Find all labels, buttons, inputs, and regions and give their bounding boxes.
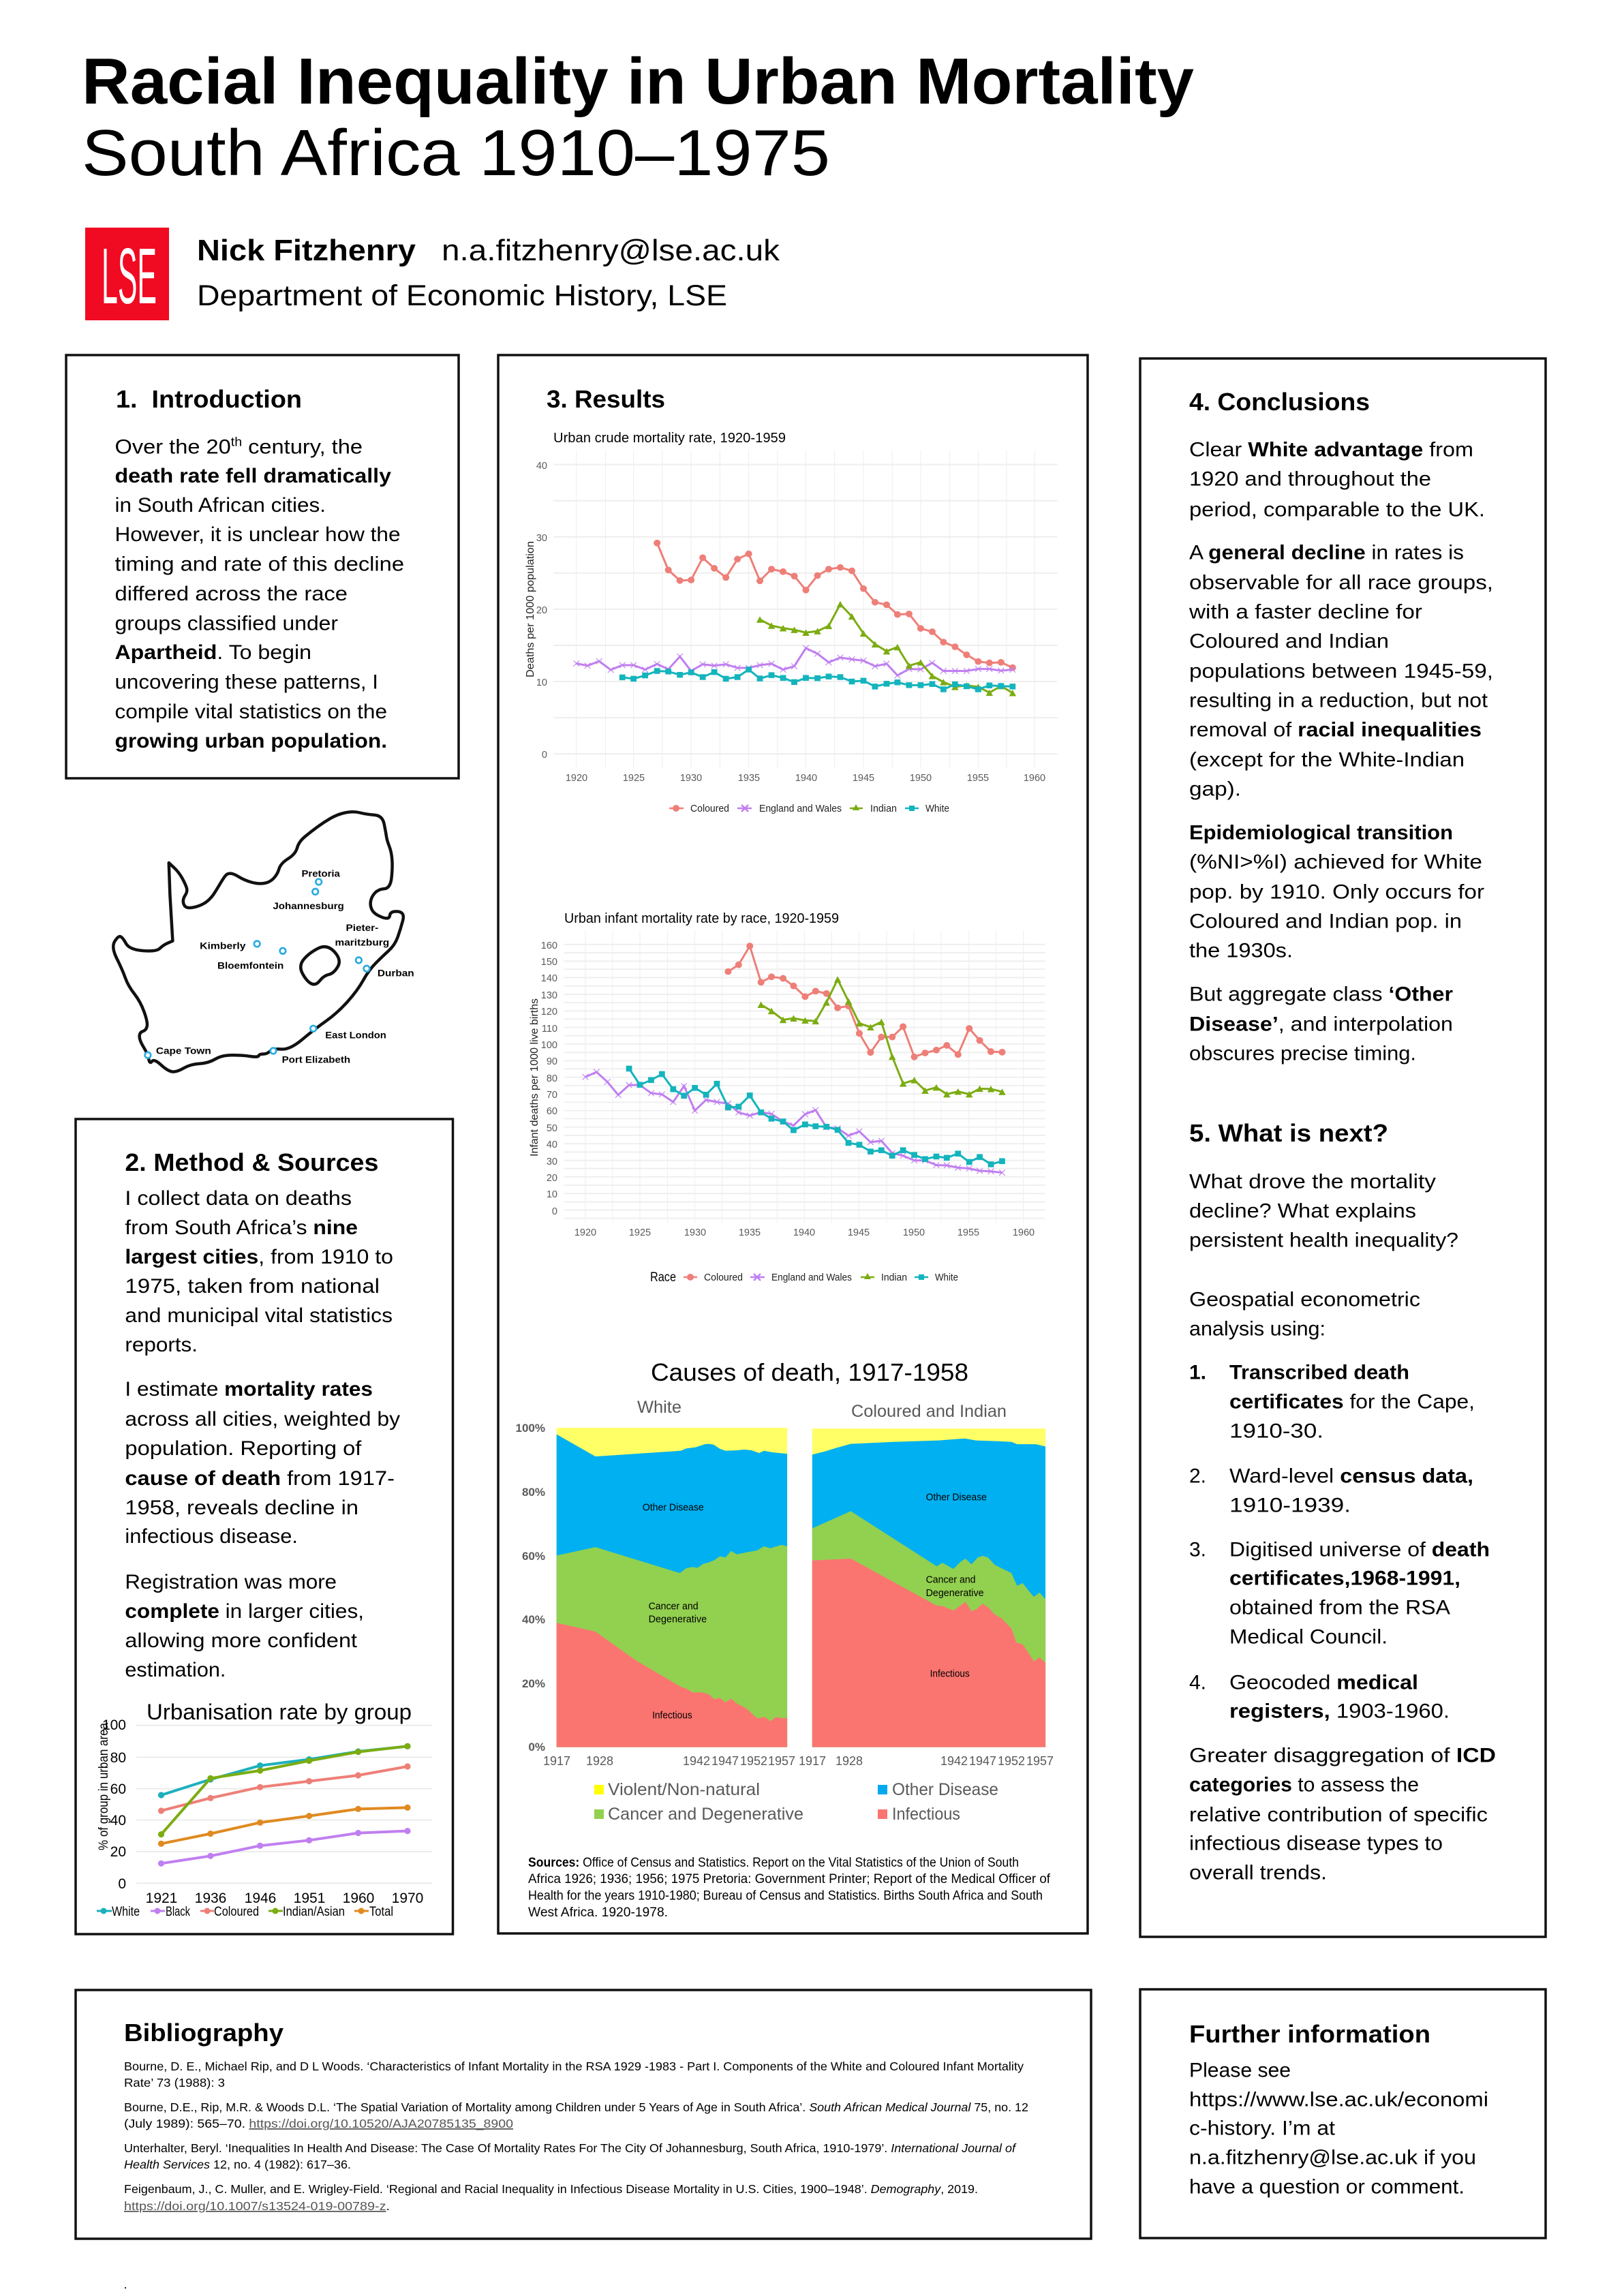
stacked area chart: causes of death: 1917 <box>799 1754 826 1768</box>
text block: further information body: https://www.lse.ac.uk/economi <box>1189 2088 1488 2111</box>
line chart: urban infant mortality rate: Coloured <box>704 1272 743 1283</box>
text block: introduction body: However, it is unclear how the <box>114 523 401 546</box>
line chart: urban crude mortality rate: Indian <box>870 803 897 814</box>
text block: method body: Registration was more <box>125 1571 337 1593</box>
line chart: urban crude mortality rate: 1945 <box>853 773 874 784</box>
icon: LSE logo <box>85 228 169 320</box>
text block: references: Health Services 12, no. 4 (1982): 617–36. <box>124 2158 351 2171</box>
map: South Africa cities: Kimberly <box>200 940 246 951</box>
line chart: urban infant mortality rate: Race <box>650 1270 676 1285</box>
stacked area chart: causes of death: 20% <box>522 1677 545 1690</box>
text block: references: Bourne, D.E., Rip, M.R. & Woods D.L. ‘The Spatial Variation of Mortality among Children under 5 Years of Age in South Africa’. South African Medical Journal 75, no. 12 <box>124 2100 1028 2114</box>
line chart: urbanisation rate by group: 20 <box>110 1844 126 1860</box>
text block: conclusions body: period, comparable to the UK. <box>1189 499 1485 521</box>
text block: introduction body: century, the <box>242 436 363 458</box>
stacked area chart: causes of death: 1952 <box>740 1754 767 1768</box>
line chart: urban crude mortality rate: 1955 <box>967 773 989 784</box>
text block: introduction body: growing urban population. <box>114 730 387 752</box>
text block: what is next body: overall trends. <box>1189 1862 1327 1884</box>
text block: what is next body: certificates for the Cape, <box>1229 1390 1475 1413</box>
stacked area chart: causes of death: 1942 <box>940 1754 968 1768</box>
text block: method body: largest cities , from 1910 to <box>125 1246 393 1268</box>
text block: what is next body: Ward-level census data, <box>1229 1465 1473 1487</box>
title <box>82 45 1194 189</box>
map: South Africa cities: maritzburg <box>335 936 389 947</box>
text block: what is next body: 2. <box>1189 1465 1206 1487</box>
author block: Nick Fitzhenry <box>197 234 416 267</box>
text block: conclusions body: A general decline in rates is <box>1189 541 1464 564</box>
map: South Africa cities: Durban <box>378 968 414 979</box>
text block: conclusions body: with a faster decline for <box>1189 601 1422 623</box>
stacked area chart: causes of death: Degenerative <box>926 1588 984 1599</box>
text block: sources: Africa 1926; 1936; 1956; 1975 Pretoria: Government Printer; Report of the Medical Officer of <box>528 1872 1051 1886</box>
line chart: urban crude mortality rate: 10 <box>536 677 547 688</box>
panel: method and sources <box>76 1119 453 1934</box>
stacked area chart: causes of death: Other Disease <box>643 1502 704 1513</box>
text block: sources: West Africa. 1920-1978. <box>528 1905 668 1920</box>
text block: what is next body <box>1189 1171 1496 1884</box>
text block: method body: reports. <box>125 1334 198 1356</box>
map: South Africa cities: Bloemfontein <box>217 960 284 971</box>
line chart: urban infant mortality rate: 0 <box>552 1206 557 1217</box>
line chart: urban infant mortality rate: 50 <box>547 1123 557 1134</box>
text block: references: Rate’ 73 (1988): 3 <box>124 2076 225 2090</box>
line chart: urban crude mortality rate: Coloured <box>690 803 729 814</box>
line chart: urban infant mortality rate: 80 <box>547 1073 557 1084</box>
line chart: urban infant mortality rate: 90 <box>547 1056 557 1067</box>
heading: results: 3. Results <box>547 385 665 413</box>
line chart: urban crude mortality rate: 0 <box>542 750 547 761</box>
text block: method body: I estimate mortality rates <box>125 1378 373 1400</box>
text block: references: Unterhalter, Beryl. ‘Inequalities In Health And Disease: The Case Of Mortality Rates For The City Of Johannesburg, South Africa, 1910-1979’. International Journal of <box>124 2141 1017 2155</box>
line chart: urbanisation rate by group: Black <box>166 1905 190 1919</box>
line chart: urban infant mortality rate: 40 <box>547 1139 557 1150</box>
stacked area chart: causes of death: 80% <box>522 1486 545 1499</box>
text block: method body: 1975, taken from national <box>125 1275 380 1298</box>
text block: what is next body: 1910-1939. <box>1229 1494 1351 1517</box>
text block: what is next body: Medical Council. <box>1229 1626 1388 1648</box>
stacked area chart: causes of death: 1952 <box>998 1754 1025 1768</box>
stacked area chart: causes of death: 100% <box>516 1422 545 1435</box>
line chart: urban infant mortality rate: 1955 <box>957 1227 979 1238</box>
line chart: urban infant mortality rate: 30 <box>547 1157 557 1167</box>
text block: conclusions body: (%NI>%I) achieved for White <box>1189 851 1482 874</box>
author block <box>197 234 780 312</box>
line chart: urban crude mortality rate: 1950 <box>910 773 932 784</box>
line chart: urbanisation rate by group: 100 <box>102 1717 126 1733</box>
line chart: urban crude mortality rate: 1935 <box>738 773 760 784</box>
line chart: urban infant mortality rate: 130 <box>541 990 557 1001</box>
line chart: urban crude mortality rate: 1960 <box>1024 773 1045 784</box>
stacked area chart: causes of death <box>516 1358 1054 1824</box>
line chart: urban infant mortality rate: White <box>935 1272 958 1283</box>
line chart: urbanisation rate by group: 1946 <box>245 1891 276 1906</box>
stacked area chart: causes of death: Infectious <box>892 1805 960 1824</box>
text block: references: https://doi.org/10.1007/s13524-019-00789-z . <box>124 2199 390 2213</box>
stacked area chart: causes of death: Cancer and Degenerative <box>608 1805 803 1824</box>
stacked area chart: causes of death: White <box>637 1398 681 1417</box>
stacked area chart: causes of death: 1947 <box>711 1754 739 1768</box>
line chart: urban infant mortality rate: Infant deaths per 1000 live births <box>529 998 540 1157</box>
line chart: urban infant mortality rate: 70 <box>547 1090 557 1101</box>
line chart: urban crude mortality rate: 20 <box>536 605 547 616</box>
text block: what is next body: analysis using: <box>1189 1318 1326 1340</box>
text block: method body: from South Africa’s nine <box>125 1216 358 1239</box>
stacked area chart: causes of death: Degenerative <box>649 1614 707 1625</box>
line chart: urbanisation rate by group: 0 <box>118 1876 126 1892</box>
text block: conclusions body: Coloured and Indian pop. in <box>1189 910 1462 932</box>
text block: conclusions body: Coloured and Indian <box>1189 630 1389 653</box>
text block: what is next body: certificates,1968-1991, <box>1229 1567 1460 1589</box>
map: South Africa cities: Pretoria <box>301 868 340 879</box>
line chart: urban crude mortality rate: Deaths per 1000 population <box>525 541 536 677</box>
line chart: urban infant mortality rate: 10 <box>547 1189 557 1200</box>
line chart: urban infant mortality rate: 1950 <box>903 1227 925 1238</box>
text block: introduction body: compile vital statistics on the <box>114 701 387 723</box>
line chart: urbanisation rate by group: Total <box>369 1905 393 1919</box>
stacked area chart: causes of death: 1942 <box>683 1754 710 1768</box>
map: South Africa cities: Pieter- <box>346 922 379 933</box>
text block: what is next body: Digitised universe of death <box>1229 1539 1490 1561</box>
text block: method body: cause of death from 1917- <box>125 1467 395 1490</box>
stacked area chart: causes of death: 1947 <box>969 1754 996 1768</box>
line chart: urbanisation rate by group: 1921 <box>146 1891 177 1906</box>
line chart: urban crude mortality rate <box>525 431 1058 814</box>
line chart: urban infant mortality rate: 1925 <box>629 1227 651 1238</box>
panel: conclusions and next steps <box>1140 358 1546 1937</box>
line chart: urban infant mortality rate: 160 <box>541 940 557 951</box>
text block: what is next body: persistent health inequality? <box>1189 1229 1458 1251</box>
stacked area chart: causes of death: 40% <box>522 1613 545 1626</box>
line chart: urbanisation rate by group: 80 <box>110 1750 126 1766</box>
line chart: urban infant mortality rate: 60 <box>547 1106 557 1117</box>
line chart: urbanisation rate by group: % of group in urban area <box>97 1723 111 1850</box>
line chart: urban infant mortality rate: 1930 <box>684 1227 706 1238</box>
line chart: urban crude mortality rate: White <box>925 803 949 814</box>
line chart: urbanisation rate by group: 40 <box>110 1813 126 1828</box>
panel: results <box>498 355 1088 1933</box>
map: South Africa cities: East London <box>325 1029 386 1040</box>
line chart: urban crude mortality rate: 1930 <box>680 773 702 784</box>
text block: method body: I collect data on deaths <box>125 1187 352 1210</box>
text block: method body: allowing more confident <box>125 1629 358 1652</box>
text block: further information body <box>1189 2060 1488 2199</box>
stacked area chart: causes of death: Other Disease <box>892 1780 998 1799</box>
text block: conclusions body: observable for all race groups, <box>1189 571 1493 594</box>
text block: conclusions body: the 1930s. <box>1189 939 1293 962</box>
text block: introduction body: timing and rate of this decline <box>114 553 404 575</box>
line chart: urban infant mortality rate: 140 <box>541 973 557 984</box>
text block: what is next body: infectious disease types to <box>1189 1832 1443 1855</box>
stacked area chart: causes of death: Coloured and Indian <box>851 1402 1007 1421</box>
text block: introduction body: uncovering these patterns, I <box>114 671 378 694</box>
text block: what is next body: 1. <box>1189 1362 1206 1383</box>
line chart: urbanisation rate by group: 1960 <box>343 1891 374 1906</box>
line chart: urban infant mortality rate: 110 <box>542 1024 557 1035</box>
line chart: urban infant mortality rate: 100 <box>541 1040 557 1051</box>
stacked area chart: causes of death: Cancer and <box>649 1601 699 1612</box>
text block: sources: Sources: Office of Census and Statistics. Report on the Vital Statistics of the Union of South <box>528 1856 1019 1870</box>
line chart: urban infant mortality rate: Urban infant mortality rate by race, 1920-1959 <box>564 911 839 926</box>
text block: conclusions body: (except for the White-Indian <box>1189 748 1465 771</box>
text block: references: (July 1989): 565–70. https://doi.org/10.10520/AJA20785135_8900 <box>124 2117 513 2131</box>
line chart: urban infant mortality rate <box>529 911 1045 1285</box>
stacked area chart: causes of death: Infectious <box>652 1710 692 1721</box>
line chart: urbanisation rate by group: 1970 <box>392 1891 423 1906</box>
text block: method body: infectious disease. <box>125 1525 298 1548</box>
text block: what is next body: registers, 1903-1960. <box>1229 1700 1450 1723</box>
text block: method body: 1958, reveals decline in <box>125 1497 358 1519</box>
line chart: urbanisation rate by group: 1936 <box>195 1891 226 1906</box>
stacked area chart: causes of death: Causes of death, 1917-1958 <box>651 1358 968 1386</box>
text block: introduction body: differed across the race <box>114 583 348 605</box>
line chart: urban infant mortality rate: 1940 <box>793 1227 815 1238</box>
text block: what is next body: categories to assess the <box>1189 1773 1419 1796</box>
text block: references: Bourne, D. E., Michael Rip, and D L Woods. ‘Characteristics of Infant Mortality in the RSA 1929 -1983 - Part I. Components of the White and Coloured Infant Mortality <box>124 2060 1024 2073</box>
map: South Africa cities: Cape Town <box>156 1045 211 1056</box>
text block: introduction body: Over the 20 <box>114 436 221 458</box>
text block: conclusions body: obscures precise timing. <box>1189 1043 1416 1065</box>
text block: method body: and municipal vital statistics <box>125 1304 393 1327</box>
stacked area chart: causes of death: Infectious <box>930 1668 970 1679</box>
text block: conclusions body: removal of racial inequalities <box>1189 718 1482 741</box>
text block: introduction body: th <box>231 435 242 448</box>
text block: sources <box>528 1856 1051 1920</box>
line chart: urban infant mortality rate: England and Wales <box>771 1272 852 1283</box>
text block: conclusions body: Clear White advantage from <box>1189 439 1473 461</box>
heading: bibliography: Bibliography <box>124 2019 284 2047</box>
heading: further information: Further information <box>1189 2020 1430 2048</box>
text block: what is next body: 3. <box>1189 1539 1206 1561</box>
panel: bibliography <box>76 1990 1091 2239</box>
text block: what is next body: decline? What explains <box>1189 1199 1416 1223</box>
stacked area chart: causes of death: 1957 <box>1026 1754 1054 1768</box>
text block: what is next body: Geospatial econometric <box>1189 1288 1420 1311</box>
line chart: urban crude mortality rate: 30 <box>536 533 547 544</box>
text block: further information body: c-history. I’m at <box>1189 2117 1336 2140</box>
stacked area chart: causes of death: 60% <box>522 1550 545 1563</box>
heading: introduction: 1. Introduction <box>116 385 302 413</box>
text: LSE <box>102 232 157 320</box>
stacked area chart: causes of death: 1928 <box>836 1754 863 1768</box>
text block: conclusions body: pop. by 1910. Only occurs for <box>1189 881 1484 904</box>
text block: method body: complete in larger cities, <box>125 1600 364 1623</box>
text block: conclusions body: resulting in a reduction, but not <box>1189 690 1488 711</box>
text block: conclusions body: Disease’ , and interpolation <box>1189 1013 1453 1036</box>
line chart: urbanisation rate by group: White <box>112 1905 140 1919</box>
map: South Africa cities: Johannesburg <box>273 900 344 911</box>
text block: introduction body: death rate fell dramatically <box>114 465 391 487</box>
line chart: urbanisation rate by group: 60 <box>110 1781 126 1797</box>
line chart: urban crude mortality rate: 1920 <box>566 773 587 784</box>
panel: introduction <box>66 355 459 778</box>
author block: Department of Economic History, LSE <box>197 279 727 312</box>
line chart: urbanisation rate by group <box>97 1700 432 1919</box>
text block: introduction body <box>114 435 404 752</box>
line chart: urban crude mortality rate: 40 <box>536 461 547 472</box>
text block: conclusions body: populations between 1945-59, <box>1189 660 1493 683</box>
stacked area chart: causes of death: 1957 <box>768 1754 795 1768</box>
line chart: urban infant mortality rate: 20 <box>547 1173 557 1184</box>
text block: introduction body: groups classified under <box>114 612 338 635</box>
text block: conclusions body: Epidemiological transition <box>1189 822 1453 844</box>
line chart: urbanisation rate by group: 1951 <box>294 1891 325 1906</box>
heading: method: 2. Method & Sources <box>125 1148 378 1176</box>
text block: what is next body: relative contribution of specific <box>1189 1803 1488 1826</box>
text block: what is next body: 4. <box>1189 1671 1206 1694</box>
stacked area chart: causes of death: Other Disease <box>926 1493 987 1503</box>
text block: what is next body: What drove the mortality <box>1189 1171 1436 1193</box>
text block: conclusions body: But aggregate class ‘Other <box>1189 983 1453 1006</box>
text block: conclusions body: 1920 and throughout the <box>1189 468 1431 491</box>
stacked area chart: causes of death: 1917 <box>543 1754 570 1768</box>
stacked area chart: causes of death: Violent/Non-natural <box>608 1780 760 1799</box>
text block: introduction body: Apartheid . To begin <box>114 641 311 664</box>
text block: what is next body: Transcribed death <box>1229 1362 1409 1383</box>
line chart: urban crude mortality rate: Urban crude mortality rate, 1920-1959 <box>553 431 786 446</box>
text block: method body: population. Reporting of <box>125 1437 362 1460</box>
text block: introduction body: in South African cities. <box>114 494 326 517</box>
text block: references: Feigenbaum, J., C. Muller, and E. Wrigley-Field. ‘Regional and Racial Inequality in Infectious Disease Mortality in U.S. Cities, 1900–1948’. Demography, 2019. <box>124 2182 978 2196</box>
line chart: urban crude mortality rate: 1925 <box>623 773 645 784</box>
text block: sources: Health for the years 1910-1980; Bureau of Census and Statistics. Births South Africa and South <box>528 1889 1043 1903</box>
line chart: urbanisation rate by group: Coloured <box>214 1905 259 1919</box>
stacked area chart: causes of death: 0% <box>528 1741 545 1754</box>
line chart: urban infant mortality rate: 150 <box>541 957 557 968</box>
line chart: urban crude mortality rate: England and Wales <box>759 803 842 814</box>
line chart: urbanisation rate by group: Urbanisation rate by group <box>147 1700 412 1724</box>
text block: what is next body: Geocoded medical <box>1229 1671 1418 1694</box>
heading: conclusions: 4. Conclusions <box>1189 388 1370 416</box>
stacked area chart: causes of death: 1928 <box>586 1754 613 1768</box>
author block: n.a.fitzhenry@lse.ac.uk <box>442 234 780 267</box>
stacked area chart: causes of death: Cancer and <box>926 1574 976 1585</box>
line chart: urban infant mortality rate: 1960 <box>1013 1227 1035 1238</box>
map: South Africa cities <box>113 812 414 1072</box>
line chart: urban infant mortality rate: Indian <box>881 1272 907 1283</box>
line chart: urban infant mortality rate: 120 <box>541 1007 557 1017</box>
text block: method body: estimation. <box>125 1659 226 1681</box>
line chart: urbanisation rate by group: Indian/Asian <box>283 1905 345 1919</box>
text block: conclusions body <box>1189 439 1493 1065</box>
text block: conclusions body: gap). <box>1189 778 1241 800</box>
text block: method body: across all cities, weighted by <box>125 1408 400 1430</box>
map: South Africa cities: Port Elizabeth <box>282 1054 350 1065</box>
panel: further information <box>1140 1989 1546 2238</box>
text block: further information body: have a question or comment. <box>1189 2175 1465 2199</box>
text block: further information body: n.a.fitzhenry@lse.ac.uk if you <box>1189 2147 1476 2169</box>
text block: references <box>124 2060 1028 2213</box>
title: South Africa 1910–1975 <box>82 117 830 189</box>
text block: further information body: Please see <box>1189 2060 1291 2081</box>
line chart: urban crude mortality rate: 1940 <box>795 773 817 784</box>
line chart: urban infant mortality rate: 1945 <box>848 1227 870 1238</box>
text block: method body <box>125 1187 400 1681</box>
text block: what is next body: obtained from the RSA <box>1229 1596 1450 1619</box>
text block: what is next body: Greater disaggregation of ICD <box>1189 1745 1496 1766</box>
line chart: urban infant mortality rate: 1920 <box>574 1227 596 1238</box>
heading: what is next: 5. What is next? <box>1189 1119 1388 1147</box>
text block: what is next body: 1910-30. <box>1229 1420 1323 1442</box>
title: Racial Inequality in Urban Mortality <box>82 45 1194 118</box>
line chart: urban infant mortality rate: 1935 <box>739 1227 761 1238</box>
